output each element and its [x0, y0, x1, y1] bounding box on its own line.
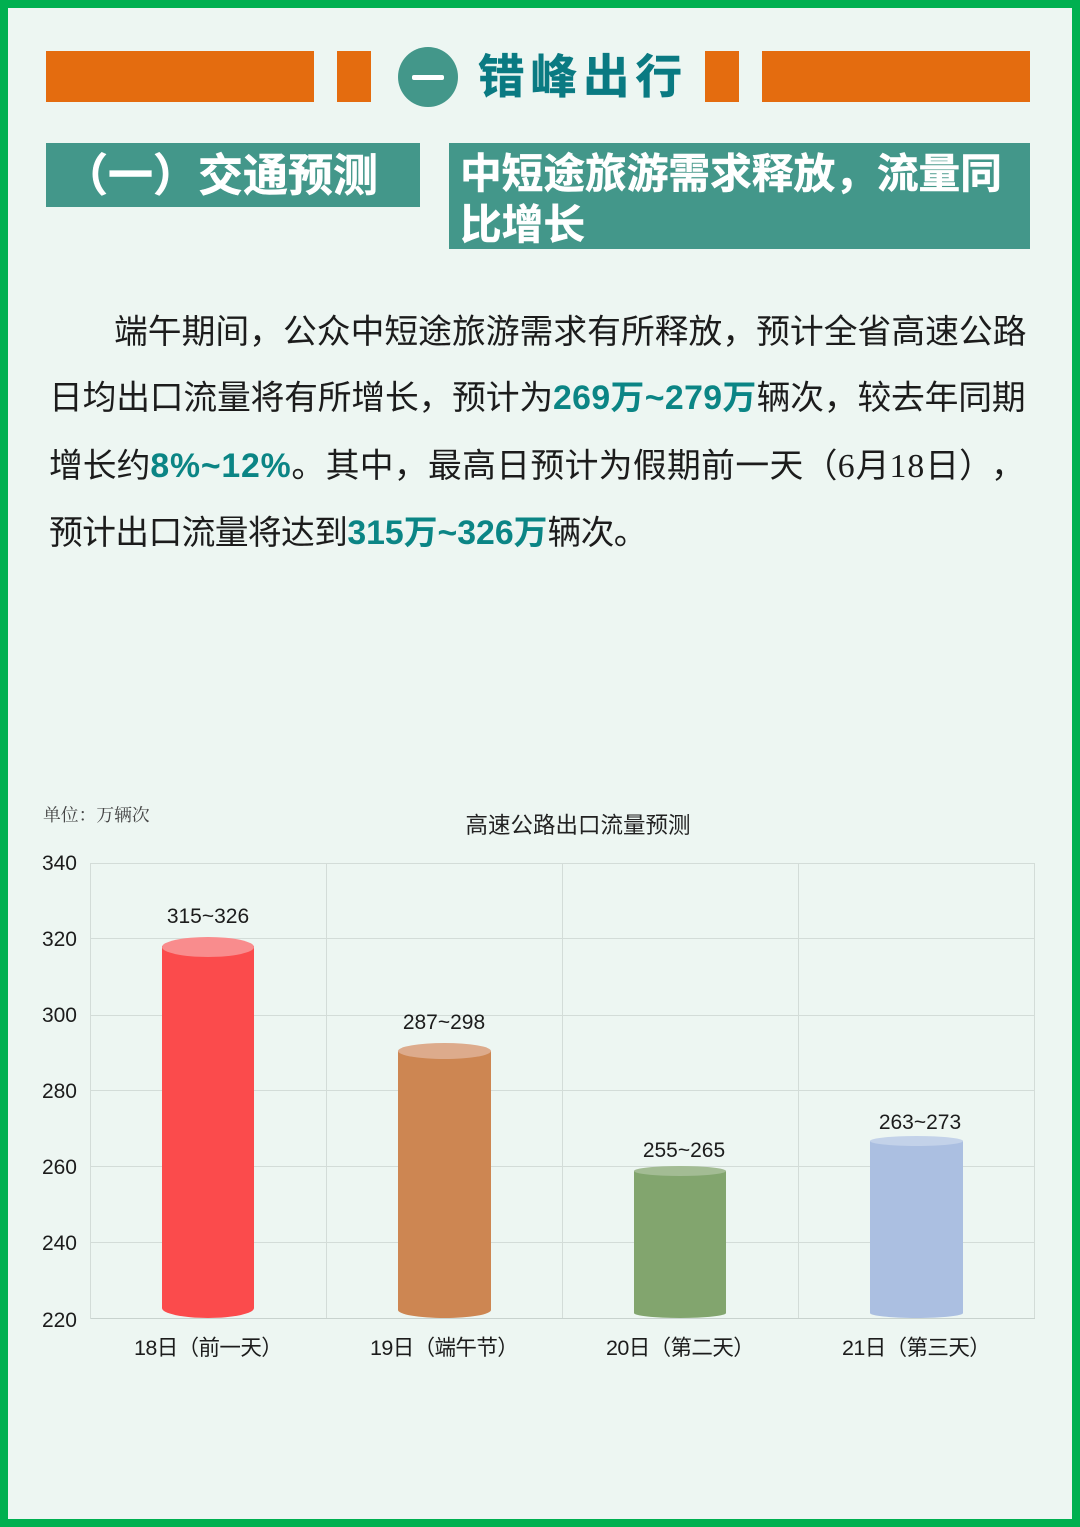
body paragraph: 增长约8%~12%。其中，最高日预计为假期前一天（6月18日）， [49, 447, 1025, 485]
y axis labels: 280 [42, 1080, 77, 1103]
y axis labels: 300 [42, 1004, 77, 1027]
y axis labels: 320 [42, 928, 77, 951]
body paragraph: 端午期间，公众中短途旅游需求有所释放，预计全省高速公路 [114, 313, 1027, 351]
x axis labels [134, 1336, 990, 1360]
chart title: 高速公路出口流量预测 [465, 813, 691, 838]
bar: 18th: 315~326 [167, 905, 249, 928]
left orange bar [46, 51, 314, 102]
unit label: 单位：万辆次 [43, 805, 150, 825]
bar: 19th [398, 1011, 491, 1318]
bar: 21st: 263~273 [879, 1111, 961, 1134]
y axis labels [42, 852, 77, 1332]
bar: 20th [634, 1139, 726, 1318]
bar: 21st [870, 1111, 963, 1318]
section header band [46, 47, 1030, 107]
y axis labels: 340 [42, 852, 77, 875]
left orange small block [337, 51, 371, 102]
x axis labels: 19日（端午节） [370, 1336, 518, 1360]
bar chart: expressway exit traffic forecast [42, 805, 1035, 1360]
right orange bar [762, 51, 1030, 102]
x axis labels: 21日（第三天） [842, 1336, 990, 1360]
right orange small block [705, 51, 739, 102]
bar: 18th [162, 905, 254, 1318]
x axis labels: 20日（第二天） [606, 1336, 754, 1360]
bar: 19th: 287~298 [403, 1011, 485, 1034]
subheading: demand release [449, 143, 1030, 249]
section title: 错峰出行 [478, 51, 688, 103]
body paragraph: 预计出口流量将达到315万~326万辆次。 [49, 514, 647, 552]
y axis labels: 240 [42, 1232, 77, 1255]
bar: 20th: 255~265 [643, 1139, 725, 1162]
subheading: demand release: 中短途旅游需求释放，流量同 [460, 150, 1002, 197]
x axis labels: 18日（前一天） [134, 1336, 282, 1360]
body paragraph: 日均出口流量将有所增长，预计为269万~279万辆次，较去年同期 [49, 379, 1025, 417]
subheading: demand release: 比增长 [460, 201, 585, 248]
y axis labels: 220 [42, 1309, 77, 1332]
subheading: traffic forecast: （一）交通预测 [63, 150, 378, 201]
subheading: traffic forecast [46, 143, 420, 207]
y axis labels: 260 [42, 1156, 77, 1179]
body paragraph [49, 313, 1027, 552]
numeral badge [398, 47, 458, 107]
